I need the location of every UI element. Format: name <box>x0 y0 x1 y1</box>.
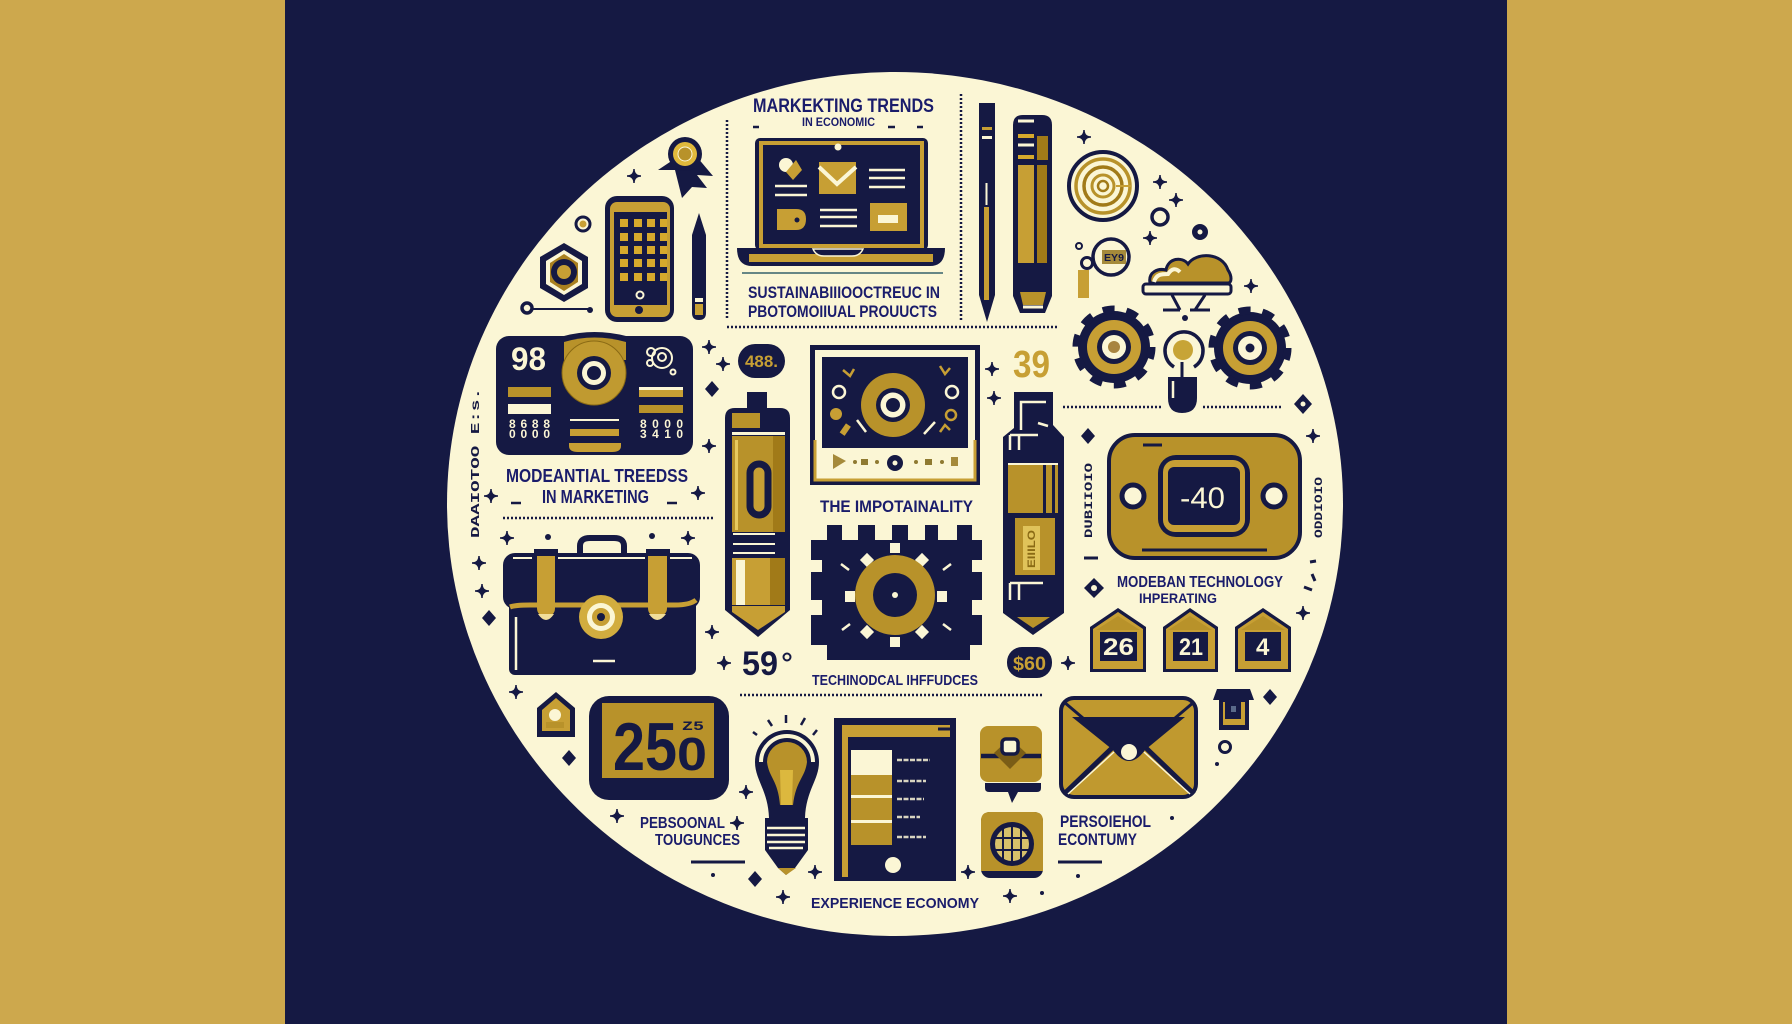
icon: target <box>1069 152 1137 220</box>
icon: left cog <box>1076 310 1152 384</box>
icon: gold tube <box>725 392 790 637</box>
gear disc <box>855 555 935 635</box>
screen marks <box>830 366 958 436</box>
icon: bulb and mouse <box>1165 315 1203 413</box>
icon: diamond marker <box>1084 578 1104 598</box>
icon: usb bottle <box>1003 392 1064 635</box>
small figures right row 2: 3410 <box>640 427 683 441</box>
right gold band <box>1507 0 1792 1024</box>
text: promotional products <box>748 283 940 321</box>
rings top right <box>1152 209 1206 238</box>
dotted dividers <box>503 94 1283 695</box>
text: personal economy: ECONTUMY <box>1058 830 1138 849</box>
panel: dashboard 98 <box>496 332 693 455</box>
icon: small house <box>537 692 575 737</box>
house stat 21: 21 <box>1179 634 1203 661</box>
icon: laptop <box>737 138 945 266</box>
metric 59: 59 <box>742 645 778 683</box>
diamond marker right <box>1294 394 1312 414</box>
icon: usb bottle: EIIILO <box>1026 529 1038 568</box>
large lens <box>861 373 925 437</box>
left bars <box>508 387 551 414</box>
heading: trends in marketing <box>506 466 688 507</box>
heading: MARKEKTING TRENDS <box>753 96 934 117</box>
panel: gold device <box>1109 435 1300 558</box>
text: promotional products: PBOTOMOIIUAL PROUUCTS <box>748 302 937 321</box>
icon: smartphone <box>605 196 674 322</box>
small figures right: 8000 <box>640 417 683 431</box>
pill 60 <box>1007 647 1052 678</box>
underline <box>742 272 943 274</box>
text: personal touches: TOUGUNCES <box>655 832 740 849</box>
heading: experience economy: EXPERIENCE ECONOMY <box>811 895 979 912</box>
small figures left: 8688 <box>509 417 550 431</box>
icon: cup <box>1213 689 1254 730</box>
house stat 4 <box>1235 608 1291 672</box>
icon: gold tag tile <box>980 726 1042 803</box>
icon: magnifier key <box>1076 239 1129 298</box>
left gold band <box>0 0 285 1024</box>
icon: briefcase <box>503 538 700 675</box>
heading: modern technology <box>1117 574 1283 606</box>
house stat 26: 26 <box>1103 634 1134 661</box>
side knobs <box>1122 485 1285 507</box>
icon: dial <box>647 348 676 374</box>
heading: the importance: THE IMPOTAINALITY <box>820 497 974 516</box>
subheading: IN ECONOMIC <box>802 115 875 129</box>
panel: value 250: 0 <box>677 728 707 780</box>
panel: value 250: Z5 <box>682 719 704 734</box>
vertical text device right: ODDIOIO <box>1314 476 1326 538</box>
text: personal economy: PERSOIEHOL <box>1060 812 1151 831</box>
panel: video player <box>810 345 980 485</box>
icon: hexagon <box>540 243 588 302</box>
house stat 26 <box>1090 608 1146 672</box>
pill 488 <box>738 344 785 378</box>
icon: thick pencil <box>1013 115 1052 313</box>
dashes <box>753 126 923 128</box>
house stat 21 <box>1163 608 1218 672</box>
panel: marketing trends title <box>753 96 934 129</box>
small figures left row 2: 0000 <box>509 427 550 441</box>
icon: award ribbon <box>658 137 713 198</box>
text: personal touches <box>640 815 745 862</box>
marks <box>1084 558 1316 590</box>
heading: modern technology: MODEBAN TECHNOLOGY <box>1117 574 1283 591</box>
text: personal touches: PEBSOONAL <box>640 815 725 832</box>
icon: tablet list <box>834 718 956 881</box>
icon: globe tile <box>981 812 1043 878</box>
icon: small ring <box>576 217 590 231</box>
centre bars <box>569 419 621 452</box>
heading: modern technology: IHPERATING <box>1139 590 1217 606</box>
metric 98: 98 <box>511 341 546 377</box>
heading: technological influences: TECHINODCAL IHFFUDCES <box>812 672 978 689</box>
cream circle panel <box>447 72 1343 936</box>
pill 60: $60 <box>1013 654 1046 675</box>
player controls <box>833 454 958 471</box>
panel: value 250: 25 <box>613 709 677 785</box>
dots <box>545 533 1219 895</box>
icon: light bulb <box>753 715 819 875</box>
value -40: -40 <box>1180 482 1225 515</box>
metric 39: 39 <box>1013 344 1050 386</box>
ring <box>1220 742 1230 752</box>
vertical text device left: DUBIIOIO <box>1084 462 1096 538</box>
icon: slim pencil <box>979 103 995 322</box>
text: promotional products: SUSTAINABIIIOOCTREUC IN <box>748 283 940 302</box>
vertical text left: DAAIOTOO E:s. <box>469 388 483 538</box>
icon: cloud <box>1143 256 1231 310</box>
house stat 4: 4 <box>1256 634 1270 661</box>
icon: connector <box>522 303 593 313</box>
panel: value 250 <box>589 696 729 800</box>
gear teeth <box>845 543 947 647</box>
heading: trends in marketing: MODEANTIAL TREEDSS <box>506 466 688 486</box>
icon: magnifier key: EY9 <box>1104 253 1124 264</box>
panel: gear square <box>811 525 982 660</box>
icon: slim pen <box>692 213 706 320</box>
icon: right cog <box>1212 310 1288 386</box>
heading: trends in marketing: IN MARKETING <box>542 487 649 507</box>
text: personal economy <box>1058 812 1151 862</box>
right bars <box>639 387 683 413</box>
icon: envelope <box>1061 698 1196 797</box>
pill 488: 488. <box>745 352 778 371</box>
list rows <box>897 760 930 837</box>
sparkles <box>472 130 1320 904</box>
